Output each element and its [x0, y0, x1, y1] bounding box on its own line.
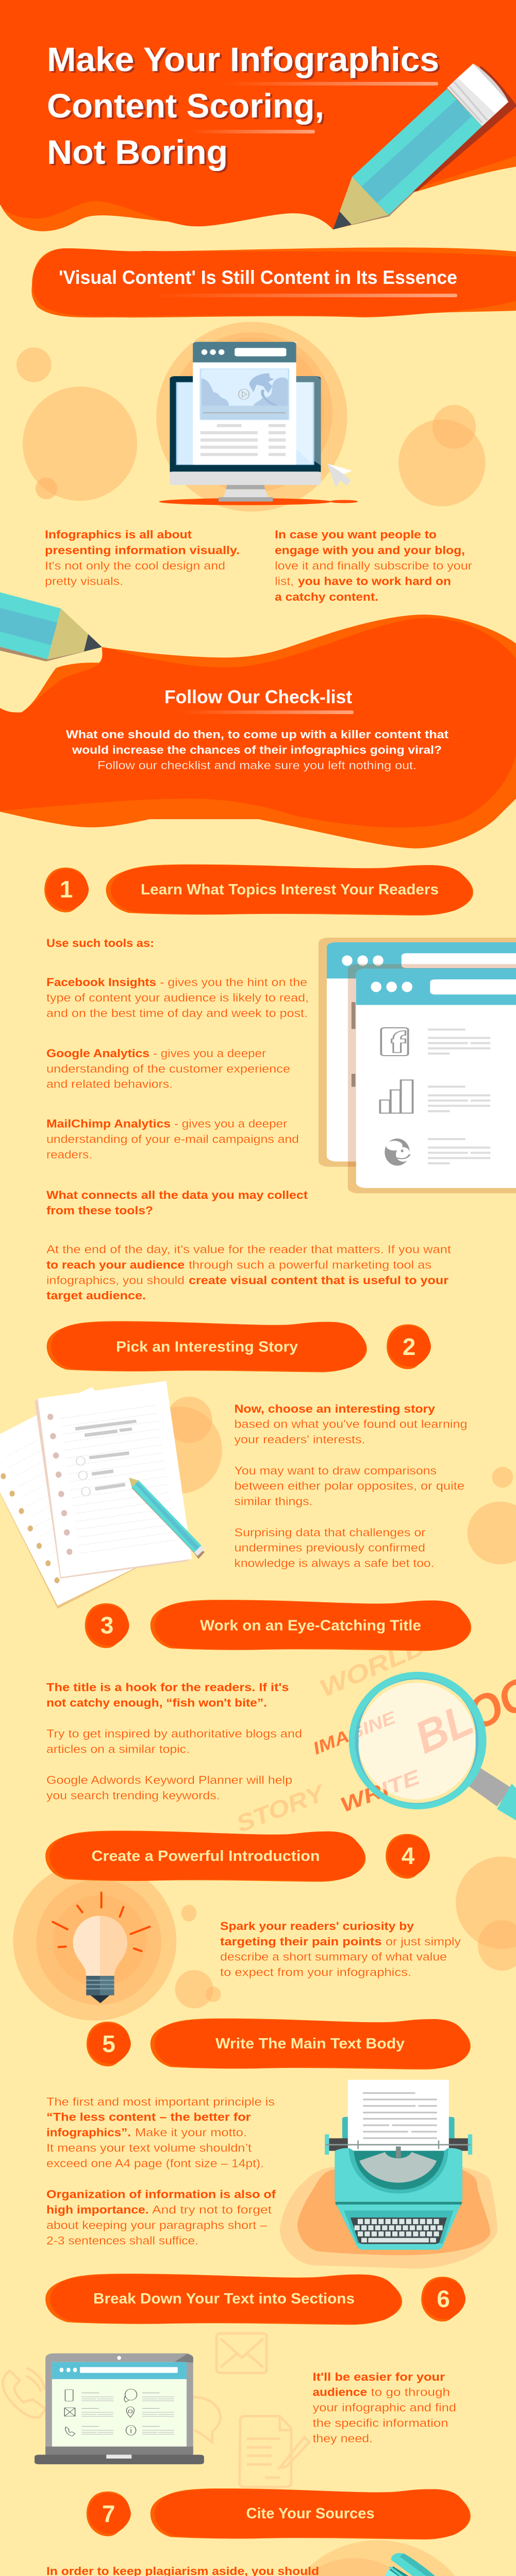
- title: [47, 40, 439, 171]
- text block: choose a story: Surprising data that challenges or: [234, 1526, 426, 1539]
- step 7 header: 7: [102, 2500, 115, 2527]
- text block: tools: type of content your audience is likely to read,: [46, 991, 309, 1004]
- text block: tools: - gives you a deeper: [174, 1117, 288, 1130]
- text block: main text body: The first and most important principle is: [46, 2095, 275, 2108]
- step 7 header: Cite Your Sources: [246, 2505, 374, 2522]
- text block: spark curiosity: targeting their pain points: [220, 1935, 381, 1948]
- text block: tools: and related behaviors.: [46, 1078, 173, 1091]
- text block: main text body: Organization of information is also of: [46, 2188, 276, 2200]
- panel: checklist blob: [0, 615, 516, 849]
- panel: visual content heading blob: [31, 247, 516, 317]
- text block: tools: Google Analytics: [46, 1047, 149, 1060]
- text block: main text body: “The less content – the better for: [46, 2111, 251, 2124]
- text block: choose a story: based on what you've found out learning: [234, 1418, 467, 1431]
- step 5 header: [87, 2019, 471, 2070]
- icon: light bulb: [13, 1857, 516, 2021]
- icon: monitor with browser window: [16, 322, 486, 512]
- text block: spark curiosity: or just simply: [386, 1935, 461, 1948]
- heading: visual content: 'Visual Content' Is Still Content in Its Essence: [59, 267, 457, 288]
- text block: main text body: Make it your motto.: [135, 2126, 247, 2139]
- text block: main text body: high importance.: [46, 2203, 149, 2216]
- step 2 header: 2: [403, 1333, 415, 1360]
- text block: tools: readers.: [46, 1148, 92, 1161]
- step 4 header: [45, 1831, 430, 1882]
- icon: word cloud under magnifying glass: STORY: [232, 1778, 330, 1837]
- step 5 header: 5: [102, 2030, 115, 2057]
- text block: main text body: 2-3 sentences shall suffice.: [46, 2234, 198, 2247]
- step 1 header: Learn What Topics Interest Your Readers: [141, 882, 439, 898]
- header blob: [0, 0, 516, 231]
- text block: title hook: not catchy enough, “fish won't bite”.: [46, 1696, 267, 1709]
- text block: title hook: articles on a similar topic.: [46, 1742, 190, 1755]
- text block: spark curiosity: Spark your readers' curiosity by: [220, 1920, 414, 1933]
- text block: spark curiosity: [220, 1920, 461, 1979]
- text block: tools: MailChimp Analytics: [46, 1117, 171, 1130]
- step 3 header: Work on an Eye-Catching Title: [200, 1618, 421, 1634]
- text block: easier for audience: It'll be easier for your: [312, 2370, 445, 2383]
- text block: tools: understanding of the customer experience: [46, 1062, 290, 1075]
- text block: checklist intro: What one should do then, to come up with a killer content that: [66, 728, 449, 741]
- text block: infographics intro: It's not only the cool design and: [45, 560, 225, 572]
- step 1 header: 1: [60, 876, 73, 903]
- text block: tools: - gives you the hint on the: [160, 976, 307, 989]
- text block: main text body: infographics”.: [46, 2126, 131, 2139]
- step 6 header: 6: [437, 2285, 450, 2312]
- text block: choose a story: knowledge is always a safe bet too.: [234, 1556, 434, 1569]
- icon: word cloud under magnifying glass: [232, 1633, 516, 1837]
- text block: easier for audience: they need.: [312, 2432, 373, 2445]
- text block: tools: to reach your audience: [46, 1258, 185, 1271]
- text block: engage readers: a catchy content.: [275, 590, 378, 603]
- icon: gavel: [211, 2540, 516, 2576]
- icon: word cloud under magnifying glass: WORLD: [315, 1633, 430, 1703]
- text block: engage readers: engage with you and your blog,: [275, 544, 465, 556]
- text block: choose a story: Now, choose an interesting story: [234, 1402, 436, 1415]
- text block: title hook: [46, 1681, 302, 1802]
- text block: choose a story: your readers' interests.: [234, 1433, 365, 1446]
- step 4 header: Create a Powerful Introduction: [92, 1848, 320, 1865]
- text block: tools: understanding of your e-mail campaigns and: [46, 1133, 299, 1146]
- text block: tools: - gives you a deeper: [153, 1047, 267, 1060]
- text block: choose a story: You may want to draw comparisons: [234, 1464, 437, 1477]
- text block: easier for audience: to go through: [371, 2386, 450, 2399]
- text block: main text body: It means your text volume shouldn’t: [46, 2141, 252, 2154]
- text block: tools: and on the best time of day and week to post.: [46, 1007, 308, 1020]
- step 4 header: 4: [402, 1842, 415, 1869]
- step 3 header: [85, 1600, 471, 1651]
- text block: engage readers: love it and finally subscribe to your: [275, 560, 473, 572]
- text block: easier for audience: [312, 2370, 456, 2445]
- text block: tools: What connects all the data you may collect: [46, 1189, 308, 1201]
- text block: main text body: And try not to forget: [152, 2203, 272, 2216]
- text block: title hook: The title is a hook for the readers. If it's: [46, 1681, 289, 1693]
- text block: checklist intro: would increase the chances of their infographics going viral?: [72, 743, 442, 756]
- text block: infographics intro: pretty visuals.: [45, 575, 123, 588]
- icon: left pencil: [0, 592, 102, 662]
- icon: papers and pencil: [0, 1381, 516, 1609]
- icon: browser windows with analytics tools: [319, 938, 516, 1193]
- text block: main text body: about keeping your paragraphs short –: [46, 2218, 268, 2232]
- heading: visual content: [59, 267, 457, 297]
- text block: tools: Facebook Insights: [46, 976, 156, 989]
- text block: tools: At the end of the day, it's value for the reader that matters. If you want: [46, 1243, 452, 1256]
- text block: tools: [46, 937, 452, 1302]
- text block: easier for audience: your infographic and find: [312, 2401, 456, 2414]
- step 2 header: Pick an Interesting Story: [116, 1339, 298, 1355]
- text block: tools: create visual content that is useful to your: [189, 1274, 448, 1287]
- text block: title hook: Try to get inspired by authoritative blogs and: [46, 1727, 302, 1740]
- step 3 header: 3: [101, 1612, 113, 1638]
- text block: choose a story: between either polar opposites, or quite: [234, 1480, 464, 1493]
- text block: easier for audience: the specific information: [312, 2416, 448, 2430]
- icon: facebook: [381, 1028, 408, 1056]
- text block: engage readers: you have to work hard on: [298, 575, 451, 588]
- text block: tools: through such a powerful marketing tool as: [189, 1258, 431, 1271]
- heading: follow our check-list: Follow Our Check-list: [164, 686, 352, 707]
- text block: tools: infographics, you should: [46, 1274, 185, 1287]
- text block: title hook: you search trending keywords.: [46, 1789, 220, 1802]
- title: Content Scoring,: [47, 87, 324, 125]
- icon: laptop: [35, 2353, 204, 2464]
- icon: faint contact icons: [3, 2333, 309, 2487]
- icon: word cloud under magnifying glass: IMAGINE: [310, 1707, 399, 1758]
- step 6 header: Break Down Your Text into Sections: [93, 2291, 355, 2307]
- text block: infographics intro: [45, 528, 240, 588]
- title: Make Your Infographics: [47, 40, 439, 78]
- text block: infographics intro: Infographics is all about: [45, 528, 192, 541]
- text block: infographics intro: presenting information visually.: [45, 544, 240, 556]
- text block: choose a story: undermines previously confirmed: [234, 1541, 425, 1554]
- text block: spark curiosity: to expect from your infographics.: [220, 1966, 411, 1979]
- text block: main text body: [46, 2095, 276, 2247]
- step 2 header: [47, 1321, 431, 1372]
- text block: engage readers: list,: [275, 575, 294, 588]
- text block: spark curiosity: describe a short summary of what value: [220, 1951, 447, 1963]
- text block: checklist intro: [66, 728, 449, 772]
- icon: mailchimp: [385, 1139, 410, 1166]
- step 7 header: [87, 2488, 471, 2539]
- step 1 header: [44, 865, 473, 916]
- step 6 header: [45, 2274, 465, 2325]
- text block: main text body: exceed one A4 page (font size – 14pt).: [46, 2157, 264, 2170]
- title: Not Boring: [47, 133, 228, 171]
- step 5 header: Write The Main Text Body: [215, 2036, 405, 2052]
- text block: choose a story: similar things.: [234, 1495, 312, 1507]
- icon: bar chart: [380, 1080, 413, 1113]
- icon: word cloud under magnifying glass: WRITE: [337, 1766, 424, 1817]
- text block: tools: Use such tools as:: [46, 937, 154, 950]
- text block: tools: from these tools?: [46, 1204, 153, 1217]
- text block: title hook: Google Adwords Keyword Planner will help: [46, 1774, 292, 1787]
- text block: engage readers: [275, 528, 473, 603]
- text block: tools: target audience.: [46, 1289, 146, 1302]
- icon: header pencil: [333, 63, 516, 229]
- text block: choose a story: [234, 1402, 467, 1569]
- text block: engage readers: In case you want people to: [275, 528, 437, 541]
- text block: easier for audience: audience: [312, 2386, 367, 2399]
- icon: typewriter: [280, 2080, 497, 2269]
- text block: checklist intro: Follow our checklist and make sure you left nothing out.: [97, 759, 417, 772]
